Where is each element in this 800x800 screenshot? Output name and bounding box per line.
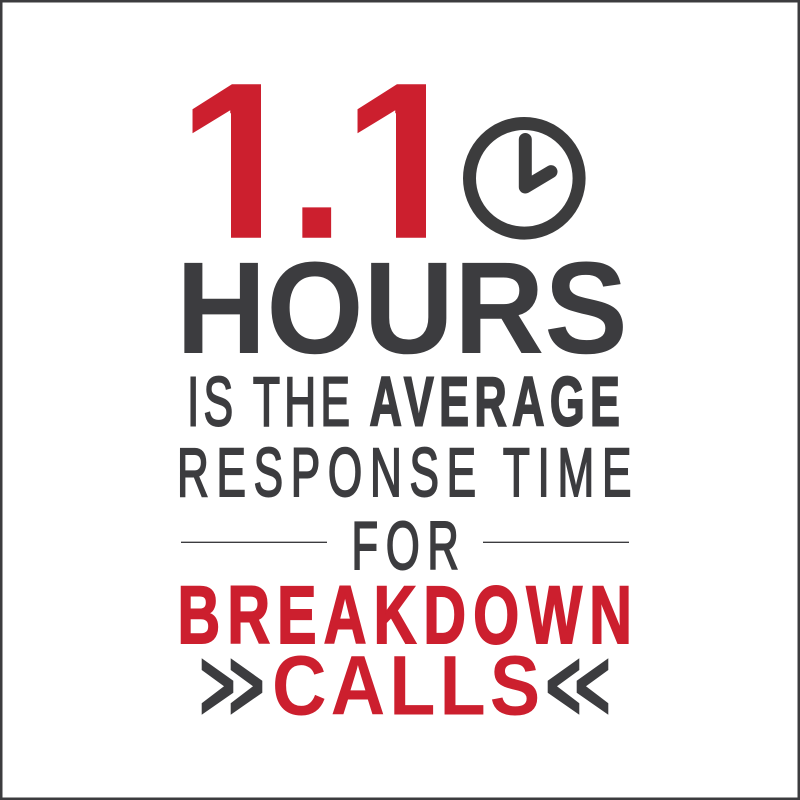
- divider left: [181, 541, 327, 543]
- heading: HOURS: HOURS: [176, 235, 628, 382]
- text line: IS THE AVERAGE: IS THE: [187, 364, 354, 441]
- text: FOR: FOR: [352, 508, 467, 584]
- text line: IS THE AVERAGE: AVERAGE: [370, 364, 625, 441]
- headline number: 1.1: 1: [342, 36, 469, 285]
- icon: right double chevron: [548, 658, 608, 715]
- headline number: 1.1: [192, 84, 426, 238]
- headline number: 1.1: 1: [177, 36, 304, 285]
- text line: IS THE AVERAGE: [187, 364, 625, 441]
- heading: CALLS: CALLS: [272, 639, 544, 733]
- text line: RESPONSE TIME: RESPONSE TIME: [177, 435, 639, 511]
- icon: clock: [470, 124, 579, 233]
- heading: BREAKDOWN: BREAKDOWN: [178, 570, 639, 661]
- icon: left double chevron: [202, 658, 262, 715]
- divider right: [483, 541, 629, 543]
- headline number: 1.1: .: [288, 54, 345, 282]
